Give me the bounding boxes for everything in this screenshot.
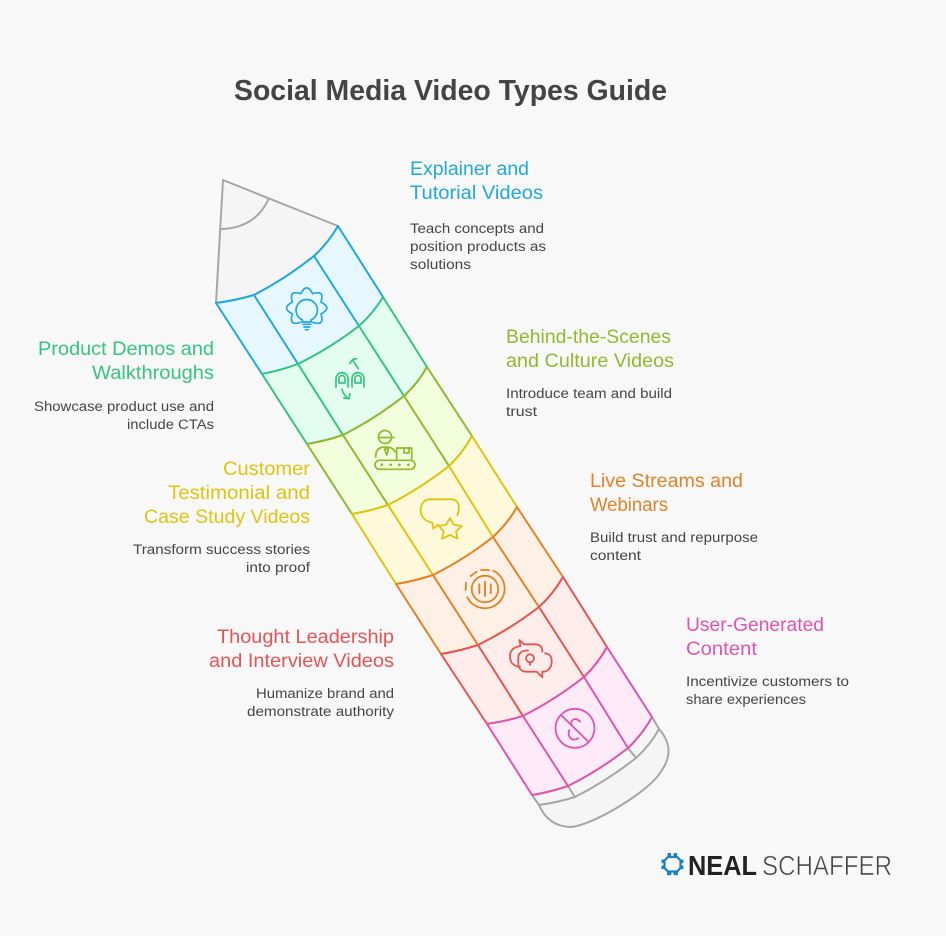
icon: speech bubble with star — [421, 499, 462, 539]
heading: user-generated content — [686, 614, 824, 660]
heading: behind the scenes — [506, 326, 674, 372]
description: explainer: position products as — [410, 239, 546, 255]
description: behind the scenes: Introduce team and build — [506, 386, 672, 402]
heading: explainer — [410, 158, 543, 204]
heading: customer testimonial — [144, 458, 310, 528]
description: live streams: Build trust and repurpose — [590, 530, 758, 546]
label: user-generated content — [686, 614, 849, 708]
heading: product demos: Walkthroughs — [92, 362, 214, 384]
title: Social Media Video Types Guide — [234, 75, 667, 107]
description: live streams — [590, 530, 758, 564]
description: customer testimonial — [133, 542, 310, 576]
heading: user-generated content: User-Generated — [686, 614, 824, 636]
description: user-generated content: share experiences — [686, 692, 806, 708]
segment: customer testimonial — [352, 436, 517, 584]
pencil tip — [216, 180, 338, 303]
heading: user-generated content: Content — [686, 638, 758, 660]
icon: hands with arrows — [336, 359, 364, 399]
label: customer testimonial — [133, 458, 310, 576]
icon: prohibited circle — [556, 709, 594, 748]
segment: user-generated content — [487, 647, 652, 795]
logo wordmark: SCHAFFER — [762, 850, 892, 881]
pencil illustration — [216, 180, 668, 827]
segment: product demos — [262, 297, 427, 444]
segment: live streams — [396, 507, 563, 654]
description: live streams: content — [590, 548, 641, 564]
description: product demos: Showcase product use and — [34, 399, 214, 415]
eraser — [532, 717, 668, 827]
description: explainer: solutions — [410, 257, 471, 273]
description: product demos — [34, 399, 214, 433]
label: behind the scenes — [506, 326, 674, 420]
description: user-generated content: Incentivize customers to — [686, 674, 849, 690]
heading: behind the scenes: Behind-the-Scenes — [506, 326, 671, 348]
description: explainer: Teach concepts and — [410, 221, 544, 237]
heading: live streams: Live Streams and — [590, 470, 743, 492]
icon: overlapping chat bubbles — [510, 640, 552, 677]
label: thought leadership — [209, 626, 395, 720]
description: thought leadership: Humanize brand and — [256, 686, 394, 702]
heading: product demos: Product Demos and — [38, 338, 214, 360]
description: explainer — [410, 221, 546, 273]
heading: explainer: Explainer and — [410, 158, 529, 180]
description: customer testimonial: into proof — [246, 560, 310, 576]
icon: sound wave circle — [466, 570, 505, 608]
description: behind the scenes — [506, 386, 672, 420]
segment: thought leadership — [441, 577, 607, 724]
segment: behind the scenes — [307, 367, 472, 514]
heading: thought leadership: and Interview Videos — [209, 650, 394, 672]
heading: explainer: Tutorial Videos — [410, 182, 543, 204]
logo icon — [662, 853, 683, 875]
logo wordmark — [688, 850, 892, 881]
icon: worker on conveyor belt — [375, 430, 415, 469]
heading: behind the scenes: and Culture Videos — [506, 350, 674, 372]
heading: thought leadership: Thought Leadership — [217, 626, 394, 648]
description: thought leadership — [247, 686, 395, 720]
description: behind the scenes: trust — [506, 404, 537, 420]
icon: gear with light bulb — [287, 288, 327, 330]
heading: live streams: Webinars — [590, 494, 668, 516]
segment: explainer — [216, 226, 383, 374]
heading: product demos — [38, 338, 214, 384]
description: thought leadership: demonstrate authority — [247, 704, 395, 720]
description: user-generated content — [686, 674, 849, 708]
heading: customer testimonial: Case Study Videos — [144, 506, 310, 528]
label: live streams — [590, 470, 758, 564]
description: product demos: include CTAs — [127, 417, 214, 433]
description: customer testimonial: Transform success stories — [133, 542, 310, 558]
label: explainer and tutorial videos — [410, 158, 546, 273]
heading: thought leadership — [209, 626, 394, 672]
heading: live streams — [590, 470, 743, 516]
logo: Neal Schaffer — [662, 850, 892, 881]
label: product demos — [34, 338, 214, 433]
heading: customer testimonial: Customer — [223, 458, 310, 480]
heading: customer testimonial: Testimonial and — [168, 482, 310, 504]
logo wordmark: NEAL — [688, 850, 757, 881]
